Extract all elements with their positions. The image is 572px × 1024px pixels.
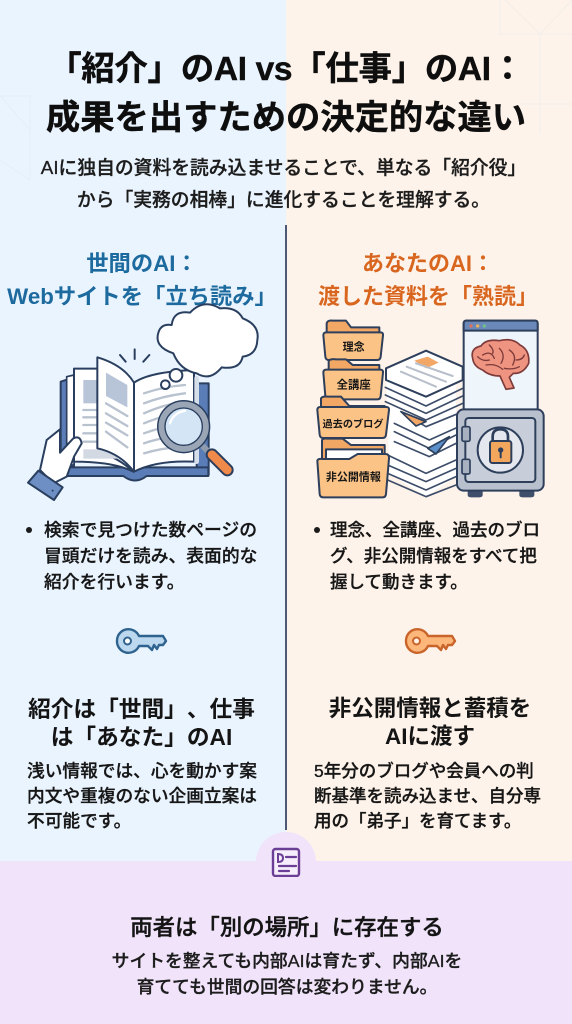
icon badge: document <box>256 832 316 892</box>
browser window with brain <box>464 321 538 411</box>
heading: left insight: は「あなた」のAI <box>51 724 232 750</box>
bullet text: right: 理念、全講座、過去のブロ <box>330 520 540 540</box>
body text: left insight: 不可能です。 <box>27 811 131 831</box>
hand <box>28 429 82 500</box>
panel: right heading: あなたのAI： <box>362 251 494 276</box>
sparkle lines <box>120 349 149 362</box>
body text: right insight: 用の「弟子」を育てます。 <box>314 811 521 831</box>
panel: left heading: Webサイトを「立ち読み」 <box>7 284 277 309</box>
icon: book with magnifier, hand and thought cloud <box>27 303 259 501</box>
book cover <box>61 369 209 480</box>
panel: left heading: 世間のAI： <box>86 251 198 276</box>
panel: left heading <box>7 251 277 309</box>
icon: blue key <box>116 628 168 654</box>
folder: 理念: 理念 <box>343 340 365 354</box>
body text: conclusion: サイトを整えても内部AIは育たず、内部AIを <box>112 951 462 971</box>
folder: 理念 <box>323 321 383 360</box>
icon: orange key <box>404 628 456 654</box>
panel: right heading <box>318 251 538 309</box>
bullet text: right: 握して動きます。 <box>330 572 468 592</box>
body text: left insight: 内文や重複のない企画立案は <box>27 786 257 806</box>
bullet text: left <box>26 520 257 592</box>
body text: conclusion <box>112 951 462 997</box>
heading: right insight <box>329 696 531 749</box>
bullet text: left: 検索で見つけた数ページの <box>44 520 257 540</box>
magnifier <box>157 400 227 470</box>
bullet text: right: グ、非公開情報をすべて把 <box>330 546 537 566</box>
panel: bottom conclusion <box>0 861 572 1024</box>
divider <box>284 225 286 830</box>
bullet text: right <box>314 520 540 592</box>
folder: 全講座 <box>323 359 383 399</box>
bullet text: left: 冒頭だけを読み、表面的な <box>44 546 257 566</box>
safe with padlock <box>457 409 544 497</box>
left turned page <box>97 357 134 472</box>
heading: left insight <box>28 696 255 750</box>
title <box>46 51 526 137</box>
right page <box>134 370 197 472</box>
subtitle <box>40 157 526 210</box>
title: 成果を出すための決定的な違い <box>46 99 526 137</box>
folder: 非公開情報 <box>317 438 389 497</box>
subtitle: AIに独自の資料を読み込ませることで、単なる「紹介役」 <box>41 157 526 178</box>
document stack <box>385 350 463 497</box>
folder: 過去のブログ <box>317 397 389 438</box>
body text: right insight: 断基準を読み込ませ、自分専 <box>314 786 541 806</box>
heading: conclusion: 両者は「別の場所」に存在する <box>130 915 444 940</box>
title: 「紹介」のAI vs「仕事」のAI： <box>48 51 524 88</box>
body text: left insight <box>27 761 257 831</box>
panel: right heading: 渡した資料を「熟読」 <box>318 284 538 309</box>
heading: right insight: AIに渡す <box>385 724 475 749</box>
body text: left insight: 浅い情報では、心を動かす案 <box>27 761 257 781</box>
heading: right insight: 非公開情報と蓄積を <box>329 696 531 721</box>
folder: 過去のブログ: 過去のブログ <box>323 417 383 430</box>
folder: 非公開情報: 非公開情報 <box>326 470 381 484</box>
thought cloud <box>158 304 258 389</box>
icon: folders, documents, brain window and safe <box>316 320 545 498</box>
subtitle: から「実務の相棒」に進化することを理解する。 <box>77 189 490 210</box>
body text: right insight <box>314 761 541 831</box>
heading: left insight: 紹介は「世間」、仕事 <box>28 696 255 722</box>
bullet text: left: 紹介を行います。 <box>44 572 184 592</box>
body text: right insight: 5年分のブログや会員への判 <box>314 761 534 781</box>
folder: 全講座: 全講座 <box>337 378 371 392</box>
body text: conclusion: 育てても世間の回答は変わりません。 <box>137 977 437 997</box>
